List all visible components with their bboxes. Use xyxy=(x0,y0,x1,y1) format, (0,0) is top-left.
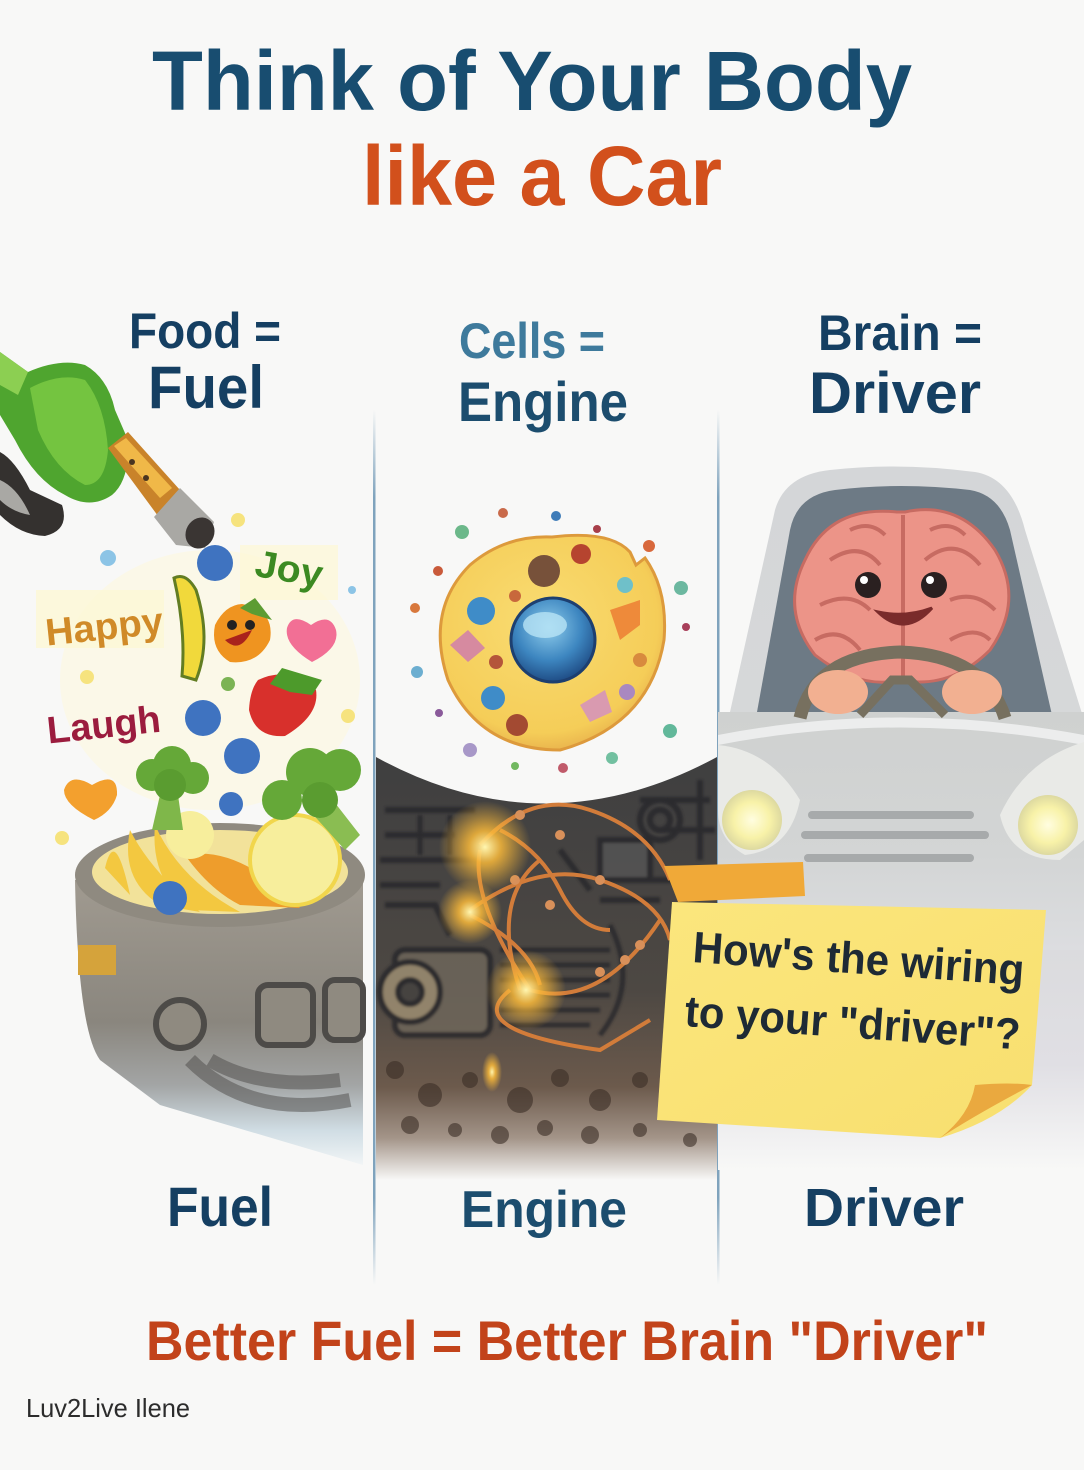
column heading: food fuel xyxy=(129,303,281,421)
column heading: brain driver: Brain = xyxy=(818,305,982,361)
column heading: food fuel: Food = xyxy=(129,303,281,359)
column heading: cells engine: Engine xyxy=(458,370,628,433)
sticky note xyxy=(657,862,1046,1138)
column heading: brain driver: Driver xyxy=(809,361,981,426)
title: like a Car xyxy=(362,129,722,223)
icon: engine bowl with fruit xyxy=(75,811,365,1165)
icon: banana xyxy=(174,576,204,680)
icon: broccoli right xyxy=(262,748,361,850)
soft glow behind food xyxy=(60,550,360,810)
rusty speckles xyxy=(386,1061,697,1147)
tagline: Better Fuel = Better Brain "Driver" xyxy=(146,1309,988,1372)
icon: broccoli left xyxy=(136,746,209,830)
word: joy: Joy xyxy=(252,543,326,596)
credit: Luv2Live Ilene xyxy=(26,1393,190,1423)
word: joy xyxy=(240,543,338,600)
column heading: brain driver xyxy=(809,305,982,426)
steering wheel and hands xyxy=(800,652,1005,718)
column heading: cells engine xyxy=(458,313,628,433)
word: laugh: Laugh xyxy=(45,699,163,752)
decorative sparkle dots xyxy=(55,513,356,845)
icon: smiling fruit xyxy=(214,598,272,662)
column label: engine: Engine xyxy=(461,1181,627,1239)
sticky note: to your "driver"? xyxy=(683,987,1022,1059)
column label: fuel: Fuel xyxy=(167,1175,273,1238)
engine wiring and sparks xyxy=(438,801,670,1092)
column label: driver: Driver xyxy=(804,1178,964,1238)
icon: fuel pump nozzle xyxy=(0,352,220,554)
sticky note: How's the wiring xyxy=(691,923,1026,995)
column heading: cells engine: Cells = xyxy=(459,313,605,369)
floating particles xyxy=(410,508,690,773)
icon: pink heart xyxy=(287,619,336,662)
icon: strawberry xyxy=(249,668,322,736)
panel dividers xyxy=(373,410,720,1285)
panel: food illustration xyxy=(36,513,365,1165)
icon: blueberries xyxy=(185,545,260,816)
icon: orange heart xyxy=(64,779,117,820)
word: happy: Happy xyxy=(43,601,165,655)
icon: car with brain driver xyxy=(718,466,1084,1170)
icon: brain xyxy=(795,510,1009,682)
title: Think of Your Body xyxy=(152,34,912,128)
icon: cell xyxy=(410,508,690,773)
headlights xyxy=(718,742,1084,860)
panel: engine cutaway background xyxy=(376,757,717,1180)
column heading: food fuel: Fuel xyxy=(148,354,264,421)
title xyxy=(152,34,912,223)
